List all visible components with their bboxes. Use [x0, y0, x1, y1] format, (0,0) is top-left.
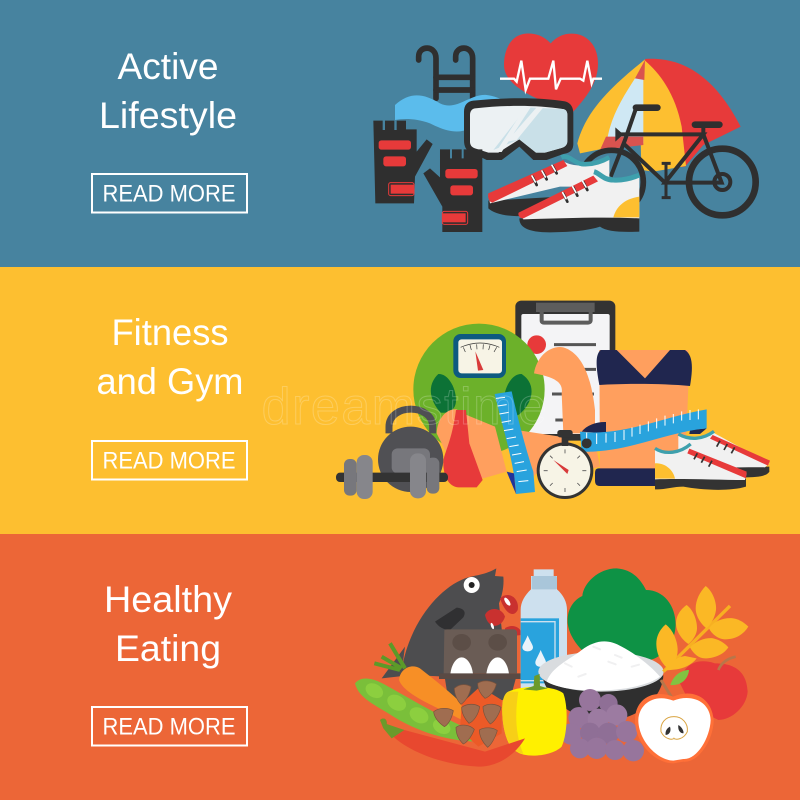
button: read more: READ MORE: [102, 180, 236, 208]
icon: red beans: [485, 595, 522, 637]
icon: pool ladder: [419, 48, 473, 98]
icon: swim goggles: [464, 98, 573, 160]
icon: water bottle: [521, 569, 567, 692]
button: read more: READ MORE: [102, 448, 236, 474]
button: read more: [92, 441, 247, 480]
icon: rear running shoe: [488, 157, 609, 216]
icon: carrot: [374, 643, 468, 723]
icon: front running shoe: [518, 172, 639, 232]
icon: pea pod: [355, 679, 480, 742]
icon: tent: [577, 59, 741, 172]
heading: active lifestyle: [99, 46, 237, 136]
icon: whole red apple: [670, 657, 748, 720]
icon: vertical measuring tape: [495, 391, 535, 494]
icon: green bathroom scale: [413, 324, 545, 455]
heading: healthy eating: Eating: [115, 628, 221, 669]
illustration: active gear: [373, 33, 756, 232]
icon: front sneaker: [655, 444, 747, 490]
icon: rear sneaker: [678, 431, 770, 477]
icon: bicycle: [580, 108, 756, 215]
heading: active lifestyle: Lifestyle: [99, 95, 237, 136]
icon: left glove: [373, 121, 433, 203]
icon: woman torso with sports bra: [582, 350, 707, 486]
button: read more: [92, 174, 247, 212]
watermark: dreamstime: [262, 378, 548, 436]
heading: fitness and gym: [96, 312, 244, 402]
icon: cut apple half: [635, 680, 714, 763]
heading: fitness and gym: and Gym: [96, 361, 244, 402]
icon: stopwatch: [537, 430, 593, 499]
heading: active lifestyle: Active: [118, 46, 218, 87]
icon: flexed arm: [534, 347, 595, 433]
icon: grapes: [560, 689, 644, 761]
icon: water wave: [395, 95, 503, 131]
heading: fitness and gym: Fitness: [112, 312, 228, 353]
icon: fish: [382, 568, 505, 678]
icon: wheat ear: [656, 586, 748, 672]
icon: bowl of rice: [538, 641, 664, 718]
panel: fitness and gym: [0, 267, 800, 534]
icon: right glove: [423, 149, 482, 232]
icon: torso in red top: [437, 409, 600, 487]
heading: healthy eating: Healthy: [104, 579, 233, 620]
icon: kettlebell: [378, 409, 443, 492]
panel: active lifestyle: [0, 0, 800, 267]
illustration: healthy food: [355, 568, 748, 767]
button: read more: READ MORE: [102, 714, 236, 740]
icon: horizontal measuring tape: [580, 409, 707, 452]
icon: yellow bell pepper: [502, 674, 567, 756]
icon: heart with pulse: [500, 33, 602, 112]
heading: healthy eating: [104, 579, 233, 669]
button: read more: [92, 707, 247, 746]
icon: egg carton: [439, 629, 522, 700]
panel: healthy eating: [0, 534, 800, 800]
icon: red chili pepper: [380, 719, 525, 767]
icon: broccoli: [568, 568, 676, 660]
icon: dumbbell: [336, 453, 448, 499]
illustration: gym gear: [336, 301, 770, 499]
icon: nuts pile: [434, 681, 502, 747]
icon: clipboard: [515, 301, 615, 441]
